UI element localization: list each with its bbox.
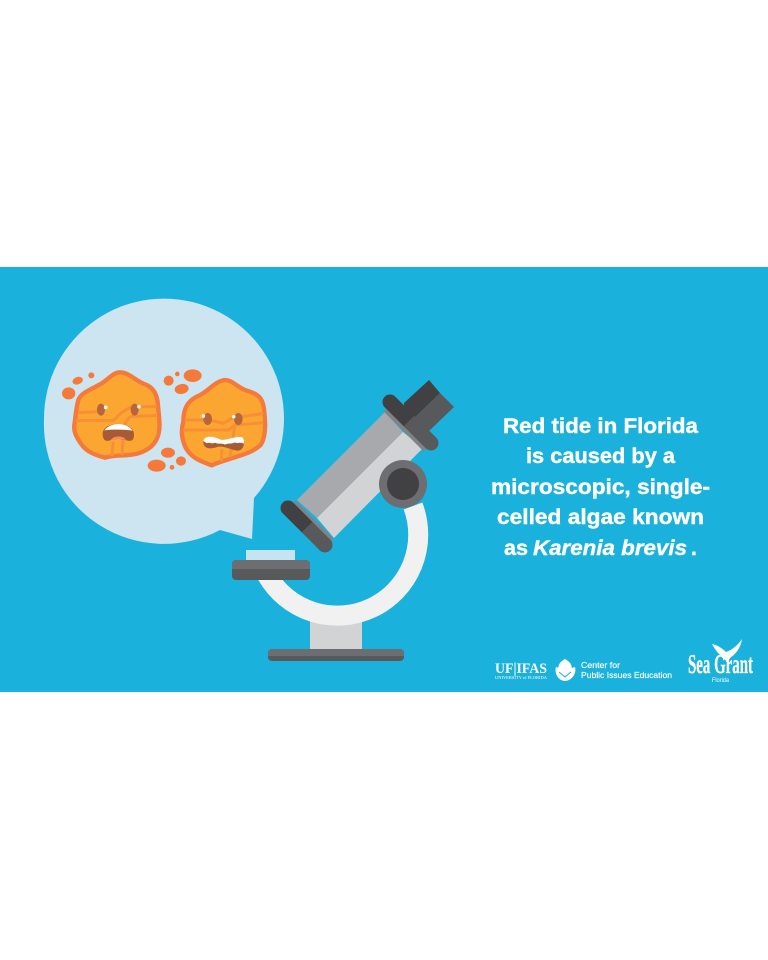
logo: Center for Public Issues Education: Center for bbox=[581, 660, 620, 670]
main text: Red tide in Florida bbox=[503, 415, 698, 438]
microscope upper collar bbox=[390, 402, 438, 450]
main text: . bbox=[691, 537, 697, 560]
algae spores: top cluster bbox=[164, 369, 202, 395]
logo: Sea Grant Florida: Florida bbox=[712, 678, 730, 684]
logo: Sea Grant Florida bbox=[688, 639, 753, 684]
logo: UF IFAS: UNIVERSITY of FLORIDA bbox=[495, 675, 548, 680]
microscope bbox=[232, 380, 454, 661]
icon: lotus bbox=[556, 659, 575, 681]
microscope eyepiece bbox=[404, 380, 454, 431]
microscope post bbox=[310, 620, 362, 650]
microscope slide bbox=[246, 550, 295, 562]
microscope arm bbox=[267, 506, 418, 616]
bubble shape bbox=[44, 299, 284, 544]
speech bubble with algae cells bbox=[44, 299, 284, 544]
logo: Center for Public Issues Education: Public Issues Education bbox=[581, 670, 672, 680]
microscope knob bbox=[379, 460, 427, 508]
microscope lower collar bbox=[288, 508, 332, 552]
icon: seagull bbox=[712, 639, 742, 661]
microscope tube bbox=[294, 410, 425, 540]
algae spores: left cluster bbox=[62, 372, 94, 399]
main text: microscopic, single- bbox=[491, 476, 710, 499]
microscope stage bbox=[232, 560, 310, 580]
main text: is caused by a bbox=[526, 445, 675, 468]
logo: UF IFAS: UF|IFAS bbox=[495, 661, 547, 677]
main text: celled algae known bbox=[497, 506, 704, 529]
algae spores: bottom cluster bbox=[148, 448, 186, 472]
main text: as bbox=[504, 537, 528, 560]
main text: Karenia brevis bbox=[533, 537, 687, 560]
algae cell: grimacing face bbox=[182, 380, 265, 465]
main text bbox=[491, 415, 710, 560]
algae cell: sick face with tongue bbox=[74, 372, 160, 458]
microscope base bbox=[268, 649, 404, 661]
logo: Center for Public Issues Education bbox=[556, 659, 672, 681]
algae illustration bbox=[62, 369, 265, 472]
panel: blue banner bbox=[0, 267, 768, 692]
